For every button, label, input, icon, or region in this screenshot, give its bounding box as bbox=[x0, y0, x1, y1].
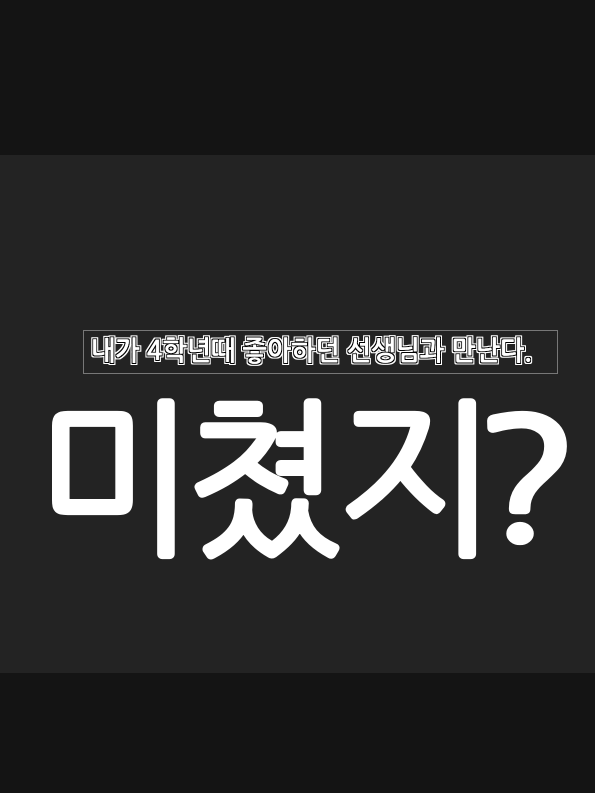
headline: ? bbox=[471, 398, 579, 566]
caption text: 내가 4학년때 좋아하던 선생님과 만난다. bbox=[91, 337, 532, 365]
top dark band bbox=[0, 0, 595, 155]
headline: 미 bbox=[36, 397, 194, 565]
caption box bbox=[84, 330, 558, 374]
bottom dark band bbox=[0, 673, 595, 793]
headline: 쳤 bbox=[183, 397, 341, 565]
headline bbox=[36, 397, 579, 566]
headline: 지 bbox=[336, 397, 496, 565]
